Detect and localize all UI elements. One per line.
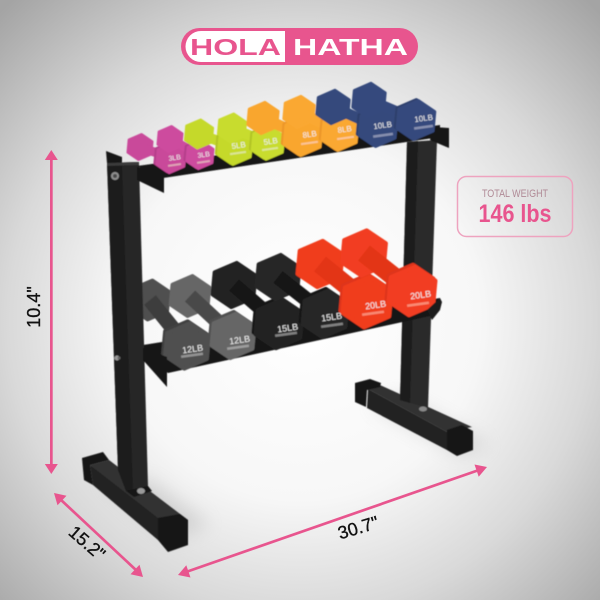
dumbbell 3LB (158, 126, 213, 169)
lower dumbbells (131, 230, 435, 369)
total weight callout: TOTAL WEIGHT (482, 188, 548, 200)
upper dumbbells (128, 83, 435, 173)
upper left bracket (107, 162, 164, 193)
logo: HATHA (293, 34, 408, 60)
dumbbell 15LB: 15LB (276, 322, 299, 334)
dumbbell 3LB: 3LB (168, 154, 182, 163)
dumbbell 20LB: 20LB (409, 289, 432, 301)
depth arrow (54, 493, 143, 577)
left post (107, 162, 152, 497)
dumbbell 10LB: 10LB (373, 120, 393, 131)
upper shelf plate (137, 125, 440, 178)
dumbbell 10LB (353, 83, 435, 139)
dumbbell 20LB (298, 241, 391, 327)
dumbbell 5LB: 5LB (231, 140, 246, 151)
dumbbell 8LB: 8LB (337, 124, 352, 135)
right post (400, 140, 437, 412)
lower shelf plate (143, 298, 440, 373)
width arrow (178, 464, 487, 578)
left foot (82, 452, 188, 552)
dumbbell 15LB (213, 263, 302, 348)
width label: 30.7" (336, 512, 381, 543)
dumbbell 5LB (185, 120, 252, 164)
dumbbell 15LB (257, 255, 347, 337)
dumbbell 20LB (342, 230, 435, 315)
logo (181, 28, 418, 65)
height label: 10.4" (24, 286, 44, 328)
dumbbell 5LB: 5LB (263, 136, 278, 147)
dumbbell rack (82, 83, 473, 552)
height arrow (45, 150, 58, 474)
dumbbell 8LB (248, 102, 322, 155)
dumbbell 20LB: 20LB (364, 299, 387, 311)
floor shadows (100, 395, 490, 540)
dumbbell 10LB (317, 90, 397, 146)
dumbbell 12LB (171, 276, 254, 358)
dumbbell 3LB (128, 134, 185, 173)
dumbbell 5LB (218, 114, 284, 159)
lower right bracket (427, 298, 442, 320)
lower left bolts (114, 356, 120, 360)
depth label: 15.2" (65, 522, 109, 564)
upper right bracket (430, 127, 449, 148)
dumbbell 12LB (131, 280, 209, 369)
right foot (355, 379, 473, 456)
dumbbell 3LB: 3LB (197, 151, 211, 160)
dumbbell 10LB: 10LB (414, 113, 434, 124)
logo: HOLA (190, 34, 281, 60)
total weight callout (458, 176, 572, 236)
dumbbell 8LB: 8LB (302, 129, 317, 140)
lower left bracket (143, 348, 167, 387)
total weight callout: 146 lbs (478, 200, 552, 228)
upper left tab (106, 151, 122, 163)
dumbbell 12LB: 12LB (228, 334, 251, 346)
dumbbell 15LB: 15LB (320, 311, 343, 323)
dumbbell 8LB (284, 96, 358, 150)
dumbbell 12LB: 12LB (181, 343, 204, 355)
